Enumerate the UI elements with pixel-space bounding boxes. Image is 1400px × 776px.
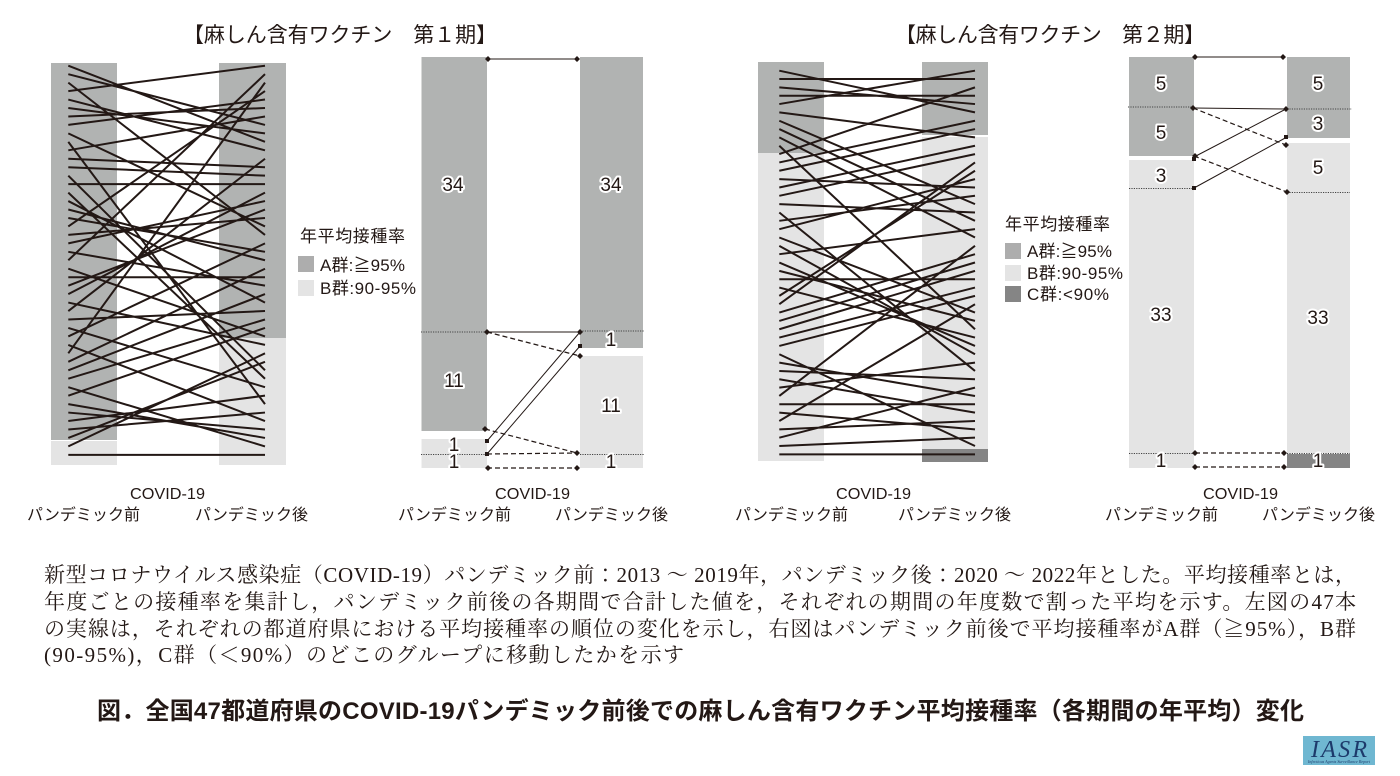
axis labels: period 1 group chart: パンデミック後	[555, 505, 668, 524]
axis labels: period 2 rank chart: パンデミック前	[735, 505, 848, 524]
text block: explanatory note: の実線は，それぞれの都道府県における平均接種率の順位の変化を示し，右図はパンデミック前後で平均接種率がA群（≧95%），B群	[44, 617, 1356, 642]
chart: period 1 group movement: 34	[600, 175, 622, 196]
legend: period 1	[298, 227, 416, 298]
axis labels: period 1 rank chart: パンデミック後	[195, 505, 308, 524]
logo: IASR: Infectious Agents Surveillance Report	[1307, 759, 1371, 764]
axis labels: period 2 rank chart: パンデミック後	[898, 505, 1011, 524]
legend: period 2: A群:≧95%	[1027, 242, 1112, 261]
axis labels: period 2 group chart: パンデミック前	[1105, 505, 1218, 524]
chart: period 1 group movement: 1	[449, 435, 459, 456]
axis labels: period 1 rank chart: パンデミック前	[27, 505, 140, 524]
chart: period 2 group movement: 33	[1150, 305, 1172, 326]
text block: explanatory note	[44, 563, 1356, 668]
chart: period 1 group movement: 1	[606, 452, 616, 473]
chart: period 1 group movement: 1	[606, 330, 616, 351]
chart: period 2 group movement: 1	[1156, 451, 1166, 472]
axis labels: period 1 rank chart: COVID-19	[130, 486, 205, 503]
axis labels: period 2 group chart: COVID-19	[1203, 486, 1278, 503]
figure caption: 図．全国47都道府県のCOVID-19パンデミック前後での麻しん含有ワクチン平均接種率（各期間の年平均）変化	[97, 697, 1304, 725]
chart: period 1 rank change	[51, 63, 286, 465]
legend: period 1: B群:90-95%	[320, 279, 416, 298]
axis labels: period 1 group chart	[398, 486, 668, 524]
chart: period 1 group movement: 1	[449, 452, 459, 473]
axis labels: period 2 rank chart	[735, 486, 1011, 524]
legend: period 2: C群:<90%	[1027, 285, 1109, 304]
text block: explanatory note: 新型コロナウイルス感染症（COVID-19）パンデミック前：2013 〜 2019年，パンデミック後：2020 〜 2022年とした。平均接種率とは，	[44, 563, 1356, 588]
chart: period 1 group movement	[421, 56, 644, 473]
legend: period 1: 年平均接種率	[300, 227, 405, 246]
chart: period 2 group movement: 33	[1307, 308, 1329, 329]
legend: period 2: 年平均接種率	[1005, 215, 1110, 234]
text block: explanatory note: (90-95%)，C群（＜90%）のどこのグループに移動したかを示す	[44, 643, 684, 668]
legend: period 2: B群:90-95%	[1027, 264, 1123, 283]
axis labels: period 1 group chart: COVID-19	[495, 486, 570, 503]
chart: period 2 rank change	[758, 62, 988, 462]
chart: period 2 group movement	[1128, 54, 1352, 472]
chart: period 2 group movement: 5	[1156, 123, 1166, 144]
axis labels: period 2 group chart: パンデミック後	[1262, 505, 1375, 524]
text block: explanatory note: 年度ごとの接種率を集計し，パンデミック前後の各期間で合計した値を，それぞれの期間の年度数で割った平均を示す。左図の47本	[44, 590, 1356, 615]
chart: period 2 group movement: 5	[1313, 74, 1323, 95]
logo: IASR: IASR	[1310, 737, 1367, 763]
legend: period 1: A群:≧95%	[320, 256, 405, 275]
chart: period 2 group movement: 5	[1156, 74, 1166, 95]
chart: period 1 group movement: 11	[444, 371, 464, 392]
chart: period 1 group movement: 11	[601, 396, 621, 417]
logo: IASR	[1303, 736, 1375, 765]
title: period 2: 【麻しん含有ワクチン 第２期】	[895, 24, 1205, 47]
title: period 1: 【麻しん含有ワクチン 第１期】	[183, 24, 497, 47]
chart: period 2 group movement: 1	[1313, 451, 1323, 472]
axis labels: period 2 group chart	[1105, 486, 1375, 524]
axis labels: period 1 rank chart	[27, 486, 308, 524]
legend: period 2	[1005, 215, 1123, 304]
chart: period 2 group movement: 5	[1313, 158, 1323, 179]
axis labels: period 2 rank chart: COVID-19	[836, 486, 911, 503]
chart: period 2 group movement: 3	[1313, 114, 1323, 135]
chart: period 1 group movement: 34	[442, 175, 464, 196]
axis labels: period 1 group chart: パンデミック前	[398, 505, 511, 524]
chart: period 2 group movement: 3	[1156, 166, 1166, 187]
